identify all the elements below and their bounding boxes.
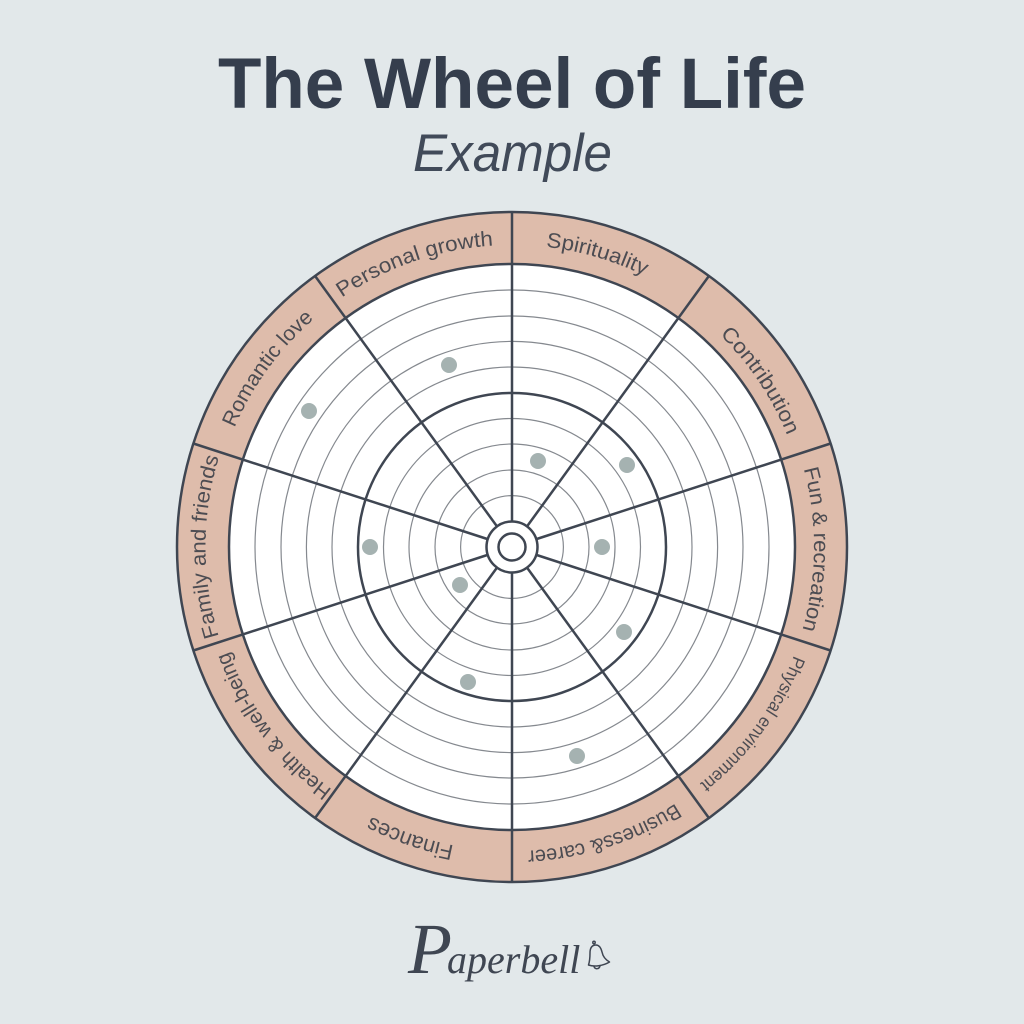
title: The Wheel of Life bbox=[218, 45, 806, 124]
spokes bbox=[193, 212, 831, 882]
score rings bbox=[255, 290, 769, 804]
logo: Paperbell wordmark: P bbox=[407, 909, 452, 989]
label: Contribution: Contribution bbox=[723, 328, 796, 434]
label: Romantic love: Romantic love bbox=[222, 313, 312, 426]
label: Personal growth: Personal growth bbox=[336, 231, 492, 296]
label: Spirituality: Spirituality bbox=[547, 233, 649, 276]
label: Family and friends: Family and friends bbox=[190, 456, 218, 639]
white score area bbox=[229, 264, 795, 830]
label: Business & career: Business& career bbox=[528, 804, 682, 862]
label: Health & well-being: Health & well-being bbox=[218, 652, 331, 800]
outer label band bbox=[177, 212, 847, 882]
center hub bbox=[486, 522, 538, 572]
logo: Paperbell wordmark: aperbell bbox=[447, 937, 580, 982]
label: Fun & recreation: Fun & recreation bbox=[802, 467, 828, 630]
subtitle: Example bbox=[413, 124, 612, 183]
wheel of life chart bbox=[176, 210, 848, 884]
score dots bbox=[301, 357, 635, 764]
midpoint ring bbox=[358, 393, 666, 701]
icon: bell bbox=[588, 941, 610, 969]
label: Physical environment: Physical environment bbox=[700, 656, 805, 792]
label: Finances: Finances bbox=[368, 818, 452, 860]
